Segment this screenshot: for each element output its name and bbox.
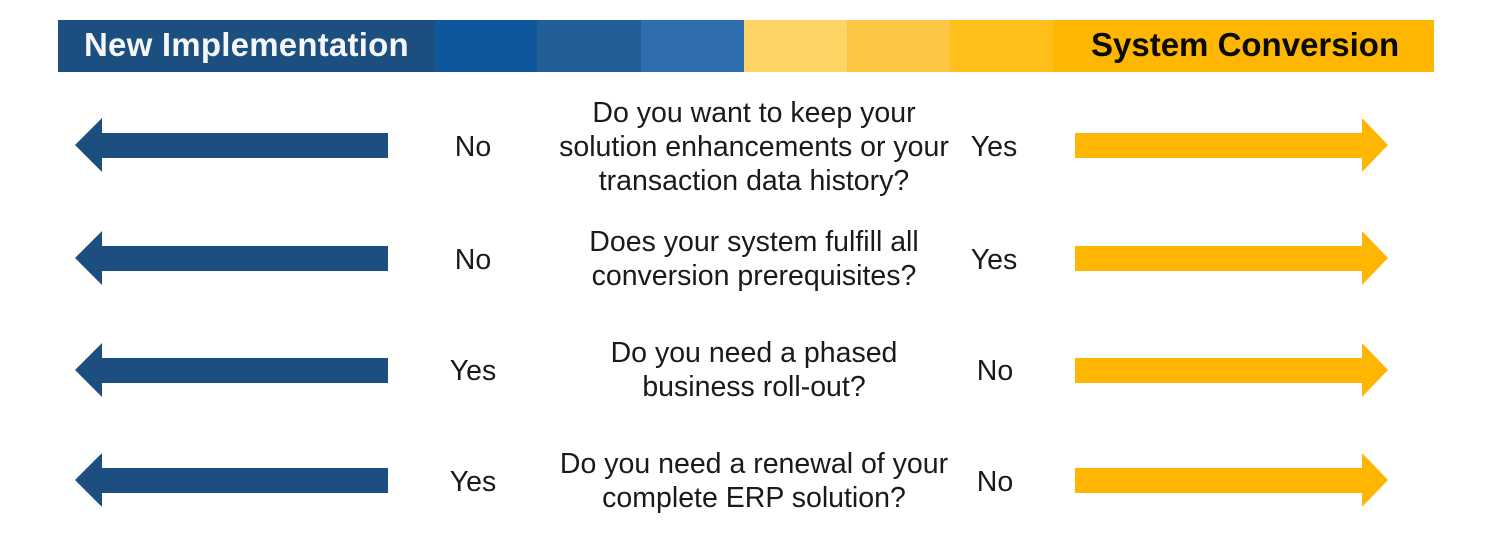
question 2: Does your system fulfill all <box>589 226 919 258</box>
header bar <box>58 20 1434 72</box>
question 2: conversion prerequisites? <box>592 260 916 292</box>
question 3 <box>611 337 897 403</box>
left arrow row 1 <box>75 118 388 172</box>
answer row 2 right: Yes <box>971 244 1017 276</box>
right arrow row 2 <box>1075 231 1388 285</box>
answer row 1 left: No <box>455 131 491 163</box>
left arrow row 2 <box>75 231 388 285</box>
question 1 <box>559 97 949 197</box>
left arrow row 3 <box>75 343 388 397</box>
right arrow row 1 <box>1075 118 1388 172</box>
answer row 4 right: No <box>977 466 1013 498</box>
answer row 1 right: Yes <box>971 131 1017 163</box>
question 2 <box>589 226 919 292</box>
right arrow row 3 <box>1075 343 1388 397</box>
question 1: transaction data history? <box>599 165 909 197</box>
heading: System Conversion: System Conversion <box>1091 26 1399 63</box>
left arrow row 4 <box>75 453 388 507</box>
question 4: Do you need a renewal of your <box>560 448 948 480</box>
answer row 4 left: Yes <box>450 466 496 498</box>
question 3: Do you need a phased <box>611 337 897 369</box>
question 3: business roll-out? <box>642 371 866 403</box>
question 1: Do you want to keep your <box>592 97 916 129</box>
right arrow row 4 <box>1075 453 1388 507</box>
question 4 <box>560 448 948 514</box>
answer row 3 right: No <box>977 355 1013 387</box>
answer row 2 left: No <box>455 244 491 276</box>
question 1: solution enhancements or your <box>559 131 949 163</box>
question 4: complete ERP solution? <box>602 482 906 514</box>
answer row 3 left: Yes <box>450 355 496 387</box>
heading: New Implementation: New Implementation <box>84 26 409 63</box>
